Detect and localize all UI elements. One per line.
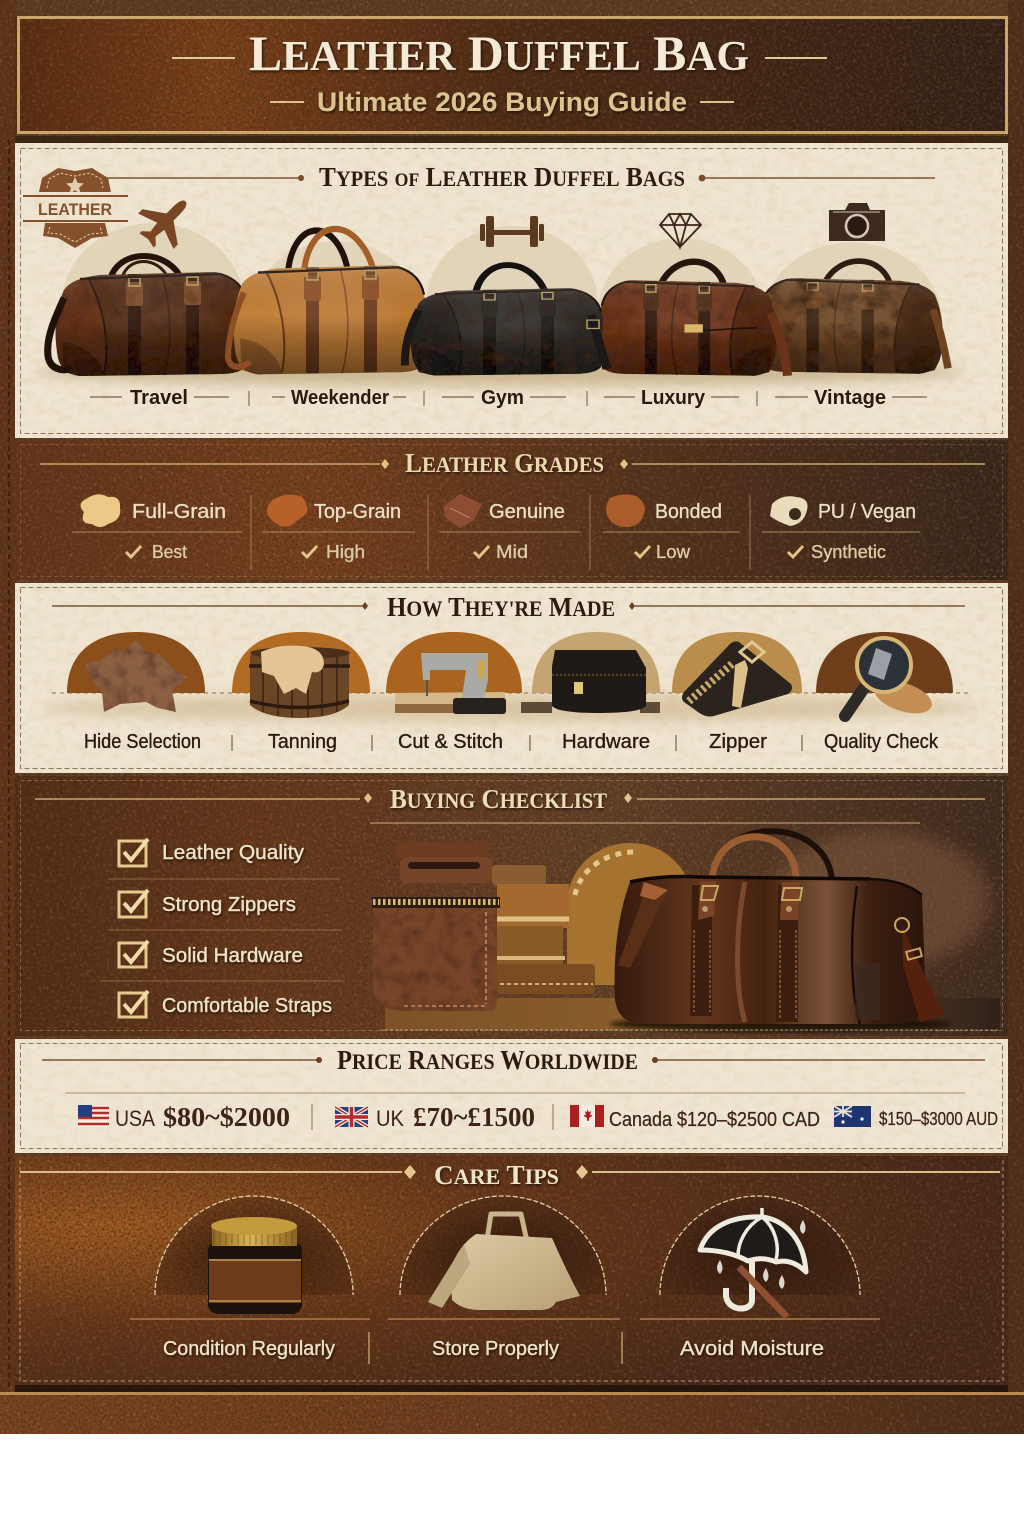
price: uk: UK	[376, 1106, 404, 1131]
price: usa	[78, 1102, 290, 1132]
label row: bag types: Vintage	[814, 387, 886, 409]
label row: steps: Zipper	[709, 731, 767, 753]
tip: store properly	[388, 1196, 620, 1360]
step: hardware	[521, 632, 660, 713]
grade: top-grain: High	[326, 542, 365, 562]
price: uk: £70~£1500	[413, 1102, 535, 1132]
label row: bag types: Weekender	[291, 387, 389, 409]
grade: pu / vegan: Synthetic	[811, 542, 886, 562]
section heading: TYPES OF LEATHER DUFFEL BAGS	[319, 162, 685, 192]
tip: avoid moisture	[640, 1196, 880, 1360]
grade: bonded	[603, 494, 740, 562]
subtitle: Ultimate 2026 Buying Guide	[317, 87, 687, 117]
label row: steps	[84, 731, 939, 753]
label row: steps: Tanning	[268, 731, 337, 753]
checklist items: Solid Hardware	[162, 945, 303, 967]
grade: genuine	[440, 494, 580, 562]
step: quality check	[816, 632, 953, 720]
grade: genuine: Mid	[496, 542, 528, 562]
price: uk	[335, 1102, 535, 1132]
icon: diamond	[660, 214, 701, 247]
panel: care tips	[20, 1160, 1003, 1381]
label row: bag types	[90, 387, 927, 409]
icon: leather badge	[23, 168, 128, 248]
checklist items: Comfortable Straps	[162, 995, 332, 1017]
section heading: HOW THEY'RE MADE	[387, 592, 615, 622]
step: tanning	[232, 632, 370, 718]
grade: bonded: Bonded	[655, 501, 722, 523]
panel: price ranges worldwide	[15, 1039, 1008, 1153]
step: hide selection	[67, 632, 205, 712]
grade: genuine: Genuine	[489, 501, 565, 523]
price: usa: $80~$2000	[163, 1102, 290, 1132]
grade: full-grain: Best	[152, 542, 187, 562]
grade: top-grain	[262, 495, 415, 562]
label row: bag types: Gym	[481, 387, 524, 409]
label row: bag types: Travel	[130, 387, 188, 409]
price: canada	[570, 1105, 820, 1131]
illustration: leather goods scene	[372, 830, 1000, 1032]
bag: travel	[48, 256, 248, 376]
label row: steps: Hardware	[562, 731, 650, 753]
label row: steps: Quality Check	[824, 731, 939, 753]
bag: vintage	[760, 261, 948, 374]
step: zipper	[672, 632, 802, 716]
panel: leather grades	[20, 444, 1002, 576]
checklist items	[100, 839, 345, 1017]
domes behind bags	[62, 223, 940, 330]
tip: condition regularly: Condition Regularly	[163, 1338, 335, 1360]
grade: top-grain: Top-Grain	[314, 501, 401, 523]
grade: bonded: Low	[656, 542, 691, 562]
bag: weekender	[228, 229, 426, 374]
tan disc	[567, 843, 693, 985]
label row: bag types: Luxury	[641, 387, 706, 409]
grade: full-grain: Full-Grain	[132, 501, 226, 523]
grade: full-grain	[72, 494, 242, 562]
label row: steps: Hide Selection	[84, 731, 201, 753]
tip: condition regularly	[130, 1196, 370, 1360]
title: LEATHER DUFFEL BAG	[249, 25, 749, 81]
icon: airplane	[129, 184, 203, 258]
panel: how they're made	[15, 583, 1008, 773]
section heading: BUYING CHECKLIST	[390, 784, 607, 814]
section heading: PRICE RANGES WORLDWIDE	[337, 1045, 638, 1075]
checklist items: Leather Quality	[162, 842, 304, 864]
ground strip	[40, 694, 980, 722]
bag: luxury	[600, 262, 788, 376]
price: australia	[834, 1106, 998, 1129]
icon: leather badge: LEATHER	[38, 200, 112, 219]
price: usa: USA	[115, 1106, 155, 1131]
label row: steps: Cut & Stitch	[398, 731, 503, 753]
step: cut and stitch	[386, 632, 522, 714]
rolls of leather	[372, 842, 595, 1011]
header banner	[18, 18, 1006, 132]
price: australia: $150–$3000 AUD	[879, 1109, 998, 1129]
grade: pu / vegan	[762, 496, 920, 562]
tip: store properly: Store Properly	[432, 1338, 559, 1360]
bag: gym	[405, 265, 607, 376]
panel: buying checklist	[20, 780, 1002, 1032]
white page below the artwork	[0, 1434, 1024, 1536]
grade: pu / vegan: PU / Vegan	[818, 501, 916, 523]
checklist items: Strong Zippers	[162, 894, 296, 916]
icon: dumbbell	[480, 216, 544, 247]
panel: types of leather duffel bags	[15, 143, 1008, 438]
section heading: LEATHER GRADES	[405, 448, 604, 478]
price: canada: Canada $120–$2500 CAD	[609, 1109, 820, 1131]
tip: avoid moisture: Avoid Moisture	[680, 1338, 824, 1360]
section heading: CARE TIPS	[434, 1160, 559, 1190]
icon: camera	[829, 203, 885, 241]
main duffel bag	[615, 831, 945, 1024]
